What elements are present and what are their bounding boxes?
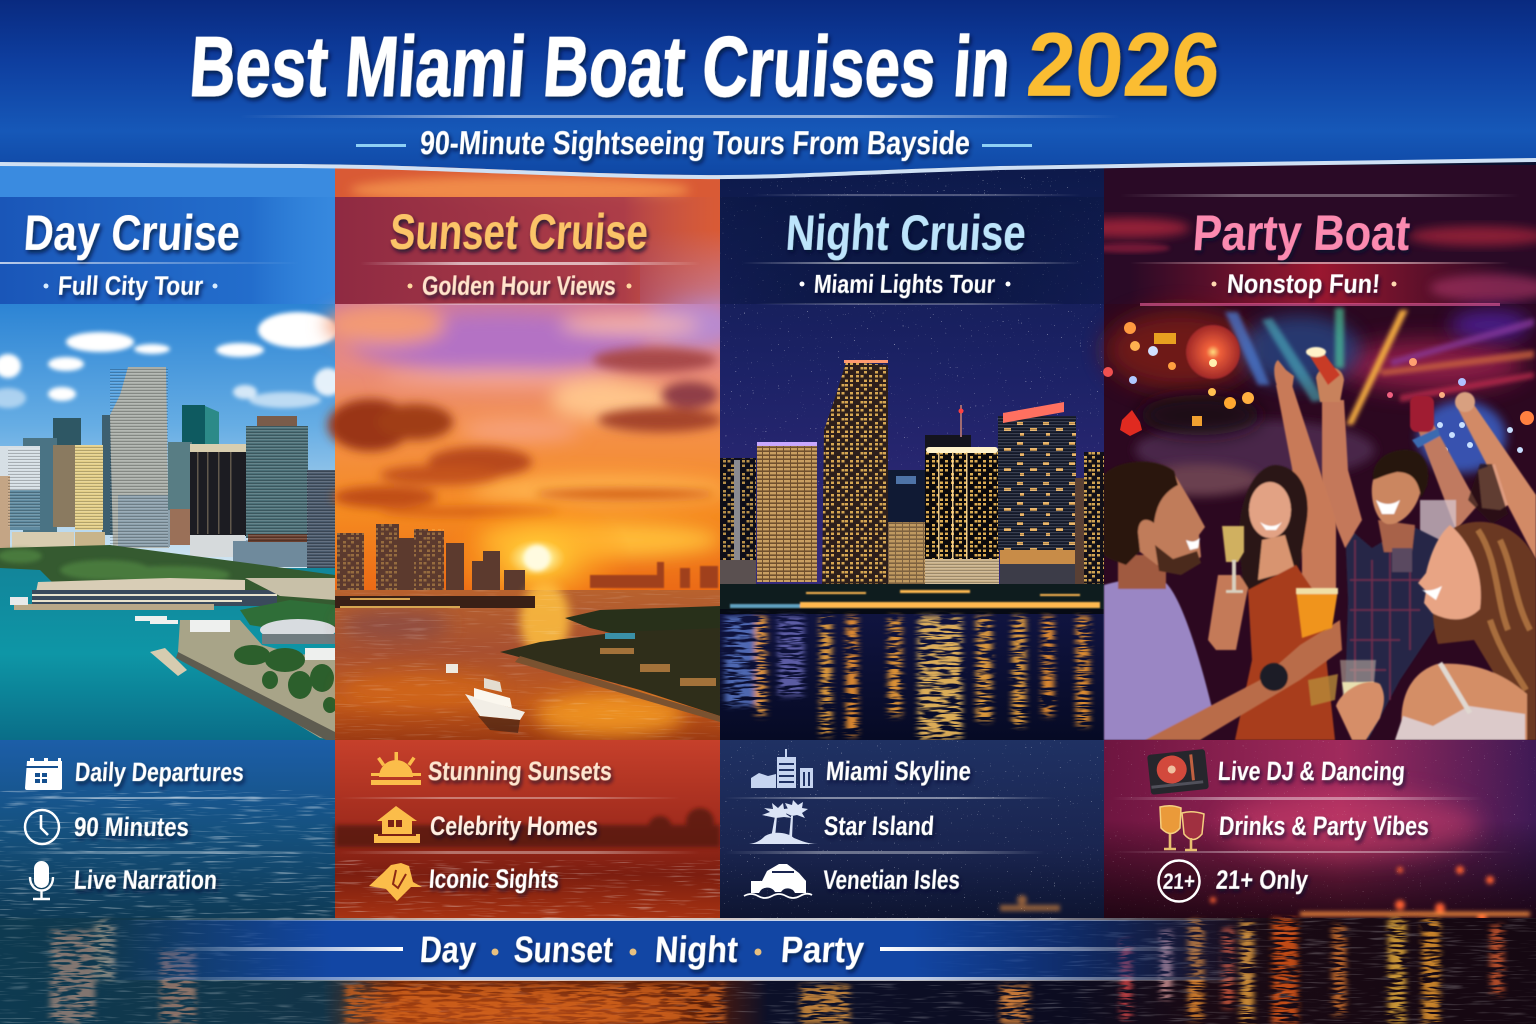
- feature band: day: [0, 740, 335, 920]
- text: Daily Departures: Daily Departures: [74, 757, 245, 787]
- heading band: party: [1070, 218, 1536, 304]
- icon: 21+ badge: [1158, 860, 1200, 902]
- feature list: night: [744, 749, 972, 898]
- heading: Day Cruise: [0, 205, 300, 301]
- heading: Party Boat: Nonstop Fun!: [1226, 269, 1381, 299]
- heading: Day Cruise: Day Cruise: [22, 205, 242, 261]
- banner labels: Sunset: [513, 928, 614, 970]
- title: Best Miami Boat Cruises in: [187, 20, 1013, 115]
- icon: sun: [371, 752, 421, 785]
- party lights: [1103, 322, 1534, 473]
- feature list: sunset: [369, 752, 613, 901]
- person: woman laughing right: [1336, 522, 1536, 740]
- heading: Party Boat: [1120, 194, 1520, 306]
- feature band: night: [720, 740, 1104, 920]
- heading: Night Cruise: Night Cruise: [784, 205, 1028, 261]
- person: woman in red dress: [1208, 360, 1336, 740]
- photo: Miami night skyline: [720, 360, 1104, 740]
- person: woman background with raised arms: [1410, 392, 1536, 560]
- feature band: party: [1104, 740, 1536, 925]
- panel: party boat: [1070, 165, 1536, 925]
- photo: Miami daytime skyline: [0, 304, 342, 740]
- text: Celebrity Homes: Celebrity Homes: [429, 811, 599, 841]
- text: Live DJ & Dancing: Live DJ & Dancing: [1217, 756, 1406, 786]
- decorative rule: [240, 115, 1120, 118]
- heading: Night Cruise: Miami Lights Tour: [813, 269, 996, 299]
- text: Miami Skyline: Miami Skyline: [825, 756, 972, 786]
- icon: skyline: [751, 749, 813, 788]
- heading: Night Cruise: [742, 194, 1082, 305]
- text: Live Narration: Live Narration: [73, 865, 218, 895]
- icon: wine glasses: [1160, 806, 1204, 850]
- icon: cruise ship: [446, 664, 525, 733]
- heading: Sunset Cruise: [360, 204, 700, 305]
- column headings: [0, 194, 1520, 306]
- title: 2026: [1023, 15, 1224, 116]
- icon: 21+ badge: 21+: [1162, 869, 1196, 894]
- text: Star Island: Star Island: [823, 811, 935, 841]
- text: Venetian Isles: Venetian Isles: [822, 865, 961, 895]
- text: Iconic Sights: Iconic Sights: [428, 864, 560, 894]
- icon: microphone: [30, 861, 53, 899]
- feature list: day: [25, 757, 245, 899]
- banner labels: Night: [654, 928, 739, 970]
- panel: sunset cruise: [325, 165, 740, 920]
- feature band: sunset: [335, 740, 720, 920]
- text: 90 Minutes: 90 Minutes: [73, 812, 190, 842]
- subtitle: 90-Minute Sightseeing Tours From Bayside: [419, 125, 971, 162]
- icon: iconic sights shield: [369, 863, 422, 901]
- icon: clock: [25, 810, 59, 844]
- icon: palm island: [749, 800, 818, 844]
- photo: party crowd: [1103, 304, 1536, 740]
- text: Drinks & Party Vibes: Drinks & Party Vibes: [1218, 811, 1430, 841]
- light beams: [1225, 308, 1534, 425]
- heading band: night: [720, 197, 1104, 304]
- text: 21+ Only: 21+ Only: [1215, 865, 1309, 895]
- icon: calendar: [25, 758, 62, 790]
- heading: Party Boat: Party Boat: [1191, 205, 1412, 261]
- heading: Sunset Cruise: Golden Hour Views: [421, 271, 617, 301]
- banner labels: Party: [780, 928, 866, 970]
- banner labels: Day: [419, 928, 478, 970]
- night water reflections: [725, 616, 1090, 740]
- panel: day cruise: [0, 165, 342, 920]
- icon: celebrity house: [374, 806, 420, 843]
- banner labels: [419, 928, 866, 970]
- heading band: day: [0, 197, 335, 304]
- panel: night cruise: [720, 165, 1104, 920]
- bottom banner: [100, 918, 1270, 981]
- person: man at left: [1104, 462, 1342, 740]
- feature list: party: [1147, 749, 1430, 902]
- drinks: [1222, 526, 1376, 706]
- heading band: sunset: [335, 197, 720, 304]
- header banner: [0, 0, 1536, 177]
- person: man in plaid shirt: [1306, 347, 1440, 740]
- icon: DJ turntable: [1147, 749, 1209, 795]
- text: Stunning Sunsets: Stunning Sunsets: [427, 756, 613, 786]
- photo: sunset over bay: [325, 301, 740, 740]
- heading: Sunset Cruise: Sunset Cruise: [388, 204, 650, 260]
- icon: boat: [744, 864, 812, 898]
- water strip and reflections: [0, 918, 1536, 1024]
- heading: Day Cruise: Full City Tour: [57, 271, 204, 301]
